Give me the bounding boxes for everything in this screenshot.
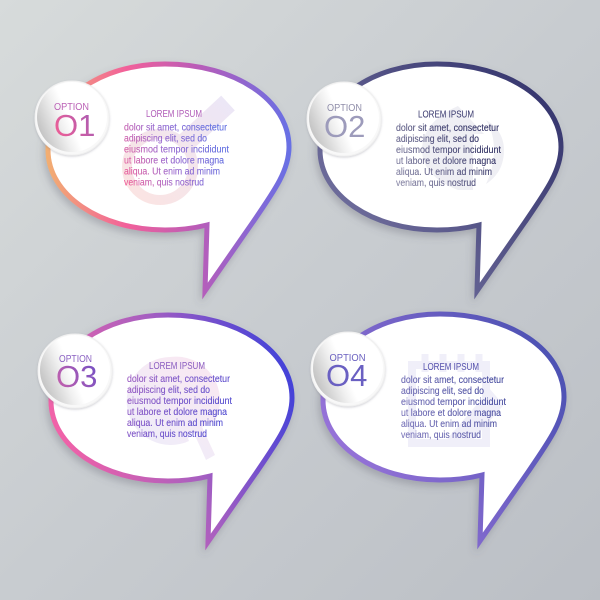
label: OPTION: OPTION [59, 354, 92, 365]
label: OPTION: OPTION [327, 103, 362, 114]
badge shading 03 [40, 335, 110, 405]
text block 03: dolor sit amet, consectetur [127, 374, 231, 385]
text block 01: dolor sit amet, consectetur [124, 122, 228, 134]
label: OPTION: OPTION [54, 102, 89, 113]
number: 03: O3 [56, 359, 97, 394]
icon: search cursor watermark [127, 357, 220, 460]
text block 04: aliqua. Ut enim ad minim [401, 419, 497, 430]
panel: option 03 bubble [38, 315, 292, 542]
text block 03: aliqua. Ut enim ad minim [127, 418, 223, 429]
text block 03: ut labore et dolore magna [127, 407, 227, 418]
badge shading 01 [37, 82, 107, 152]
badge shading 04 [313, 333, 383, 403]
badge shading 02 [309, 83, 379, 153]
text block 01: LOREM IPSUM [146, 109, 202, 120]
number badge 02 [307, 82, 381, 156]
number: 04: O4 [326, 358, 367, 393]
text block 01: adipiscing elit, sed do [124, 134, 207, 144]
text block 04: ut labore et dolore magna [401, 408, 501, 419]
speech bubble outline 04 [323, 314, 564, 541]
panel: option 01 bubble [35, 64, 289, 291]
text block 02 [396, 110, 501, 189]
text block 04: eiusmod tempor incididunt [401, 397, 506, 408]
text block 02: dolor sit amet, consectetur [396, 123, 500, 134]
number: 02: O2 [324, 109, 365, 144]
panel: option 02 bubble [307, 64, 561, 291]
text block 03: veniam, quis nostrud [127, 429, 207, 440]
number badge 01 [35, 81, 109, 155]
icon: calendar watermark [412, 354, 503, 446]
text block 01 [124, 109, 229, 188]
number badge 04 [311, 332, 385, 406]
text block 04: adipiscing elit, sed do [401, 386, 484, 397]
text block 01: veniam, quis nostrud [124, 178, 204, 188]
speech bubble outline 02 [320, 64, 561, 291]
text block 04 [401, 362, 506, 441]
text block 02: adipiscing elit, sed do [396, 134, 479, 145]
speech bubble outline 03 [51, 315, 292, 542]
text block 01: ut labore et dolore magna [124, 156, 224, 166]
text block 02: aliqua. Ut enim ad minim [396, 167, 492, 178]
text block 02: eiusmod tempor incididunt [396, 145, 501, 156]
text block 02: veniam, quis nostrud [396, 178, 476, 189]
label: OPTION: OPTION [330, 353, 366, 364]
panel: option 04 bubble [311, 314, 564, 541]
text block 01: eiusmod tempor incididunt [124, 144, 229, 156]
text block 03: adipiscing elit, sed do [127, 385, 210, 396]
number badge 03 [38, 334, 112, 408]
icon: gender symbol watermark [127, 103, 228, 200]
text block 01: aliqua. Ut enim ad minim [124, 166, 220, 178]
text block 04: veniam, quis nostrud [401, 430, 481, 441]
number: 01: O1 [54, 108, 95, 143]
text block 04: LOREM IPSUM [423, 362, 479, 373]
text block 03 [127, 361, 232, 440]
text block 03: eiusmod tempor incididunt [127, 396, 232, 407]
text block 02: ut labore et dolore magna [396, 156, 496, 167]
text block 04: dolor sit amet, consectetur [401, 375, 505, 386]
speech bubble outline 01 [48, 64, 289, 291]
text block 02: LOREM IPSUM [418, 110, 474, 120]
icon: arrows watermark [422, 106, 504, 190]
text block 03: LOREM IPSUM [149, 361, 205, 372]
